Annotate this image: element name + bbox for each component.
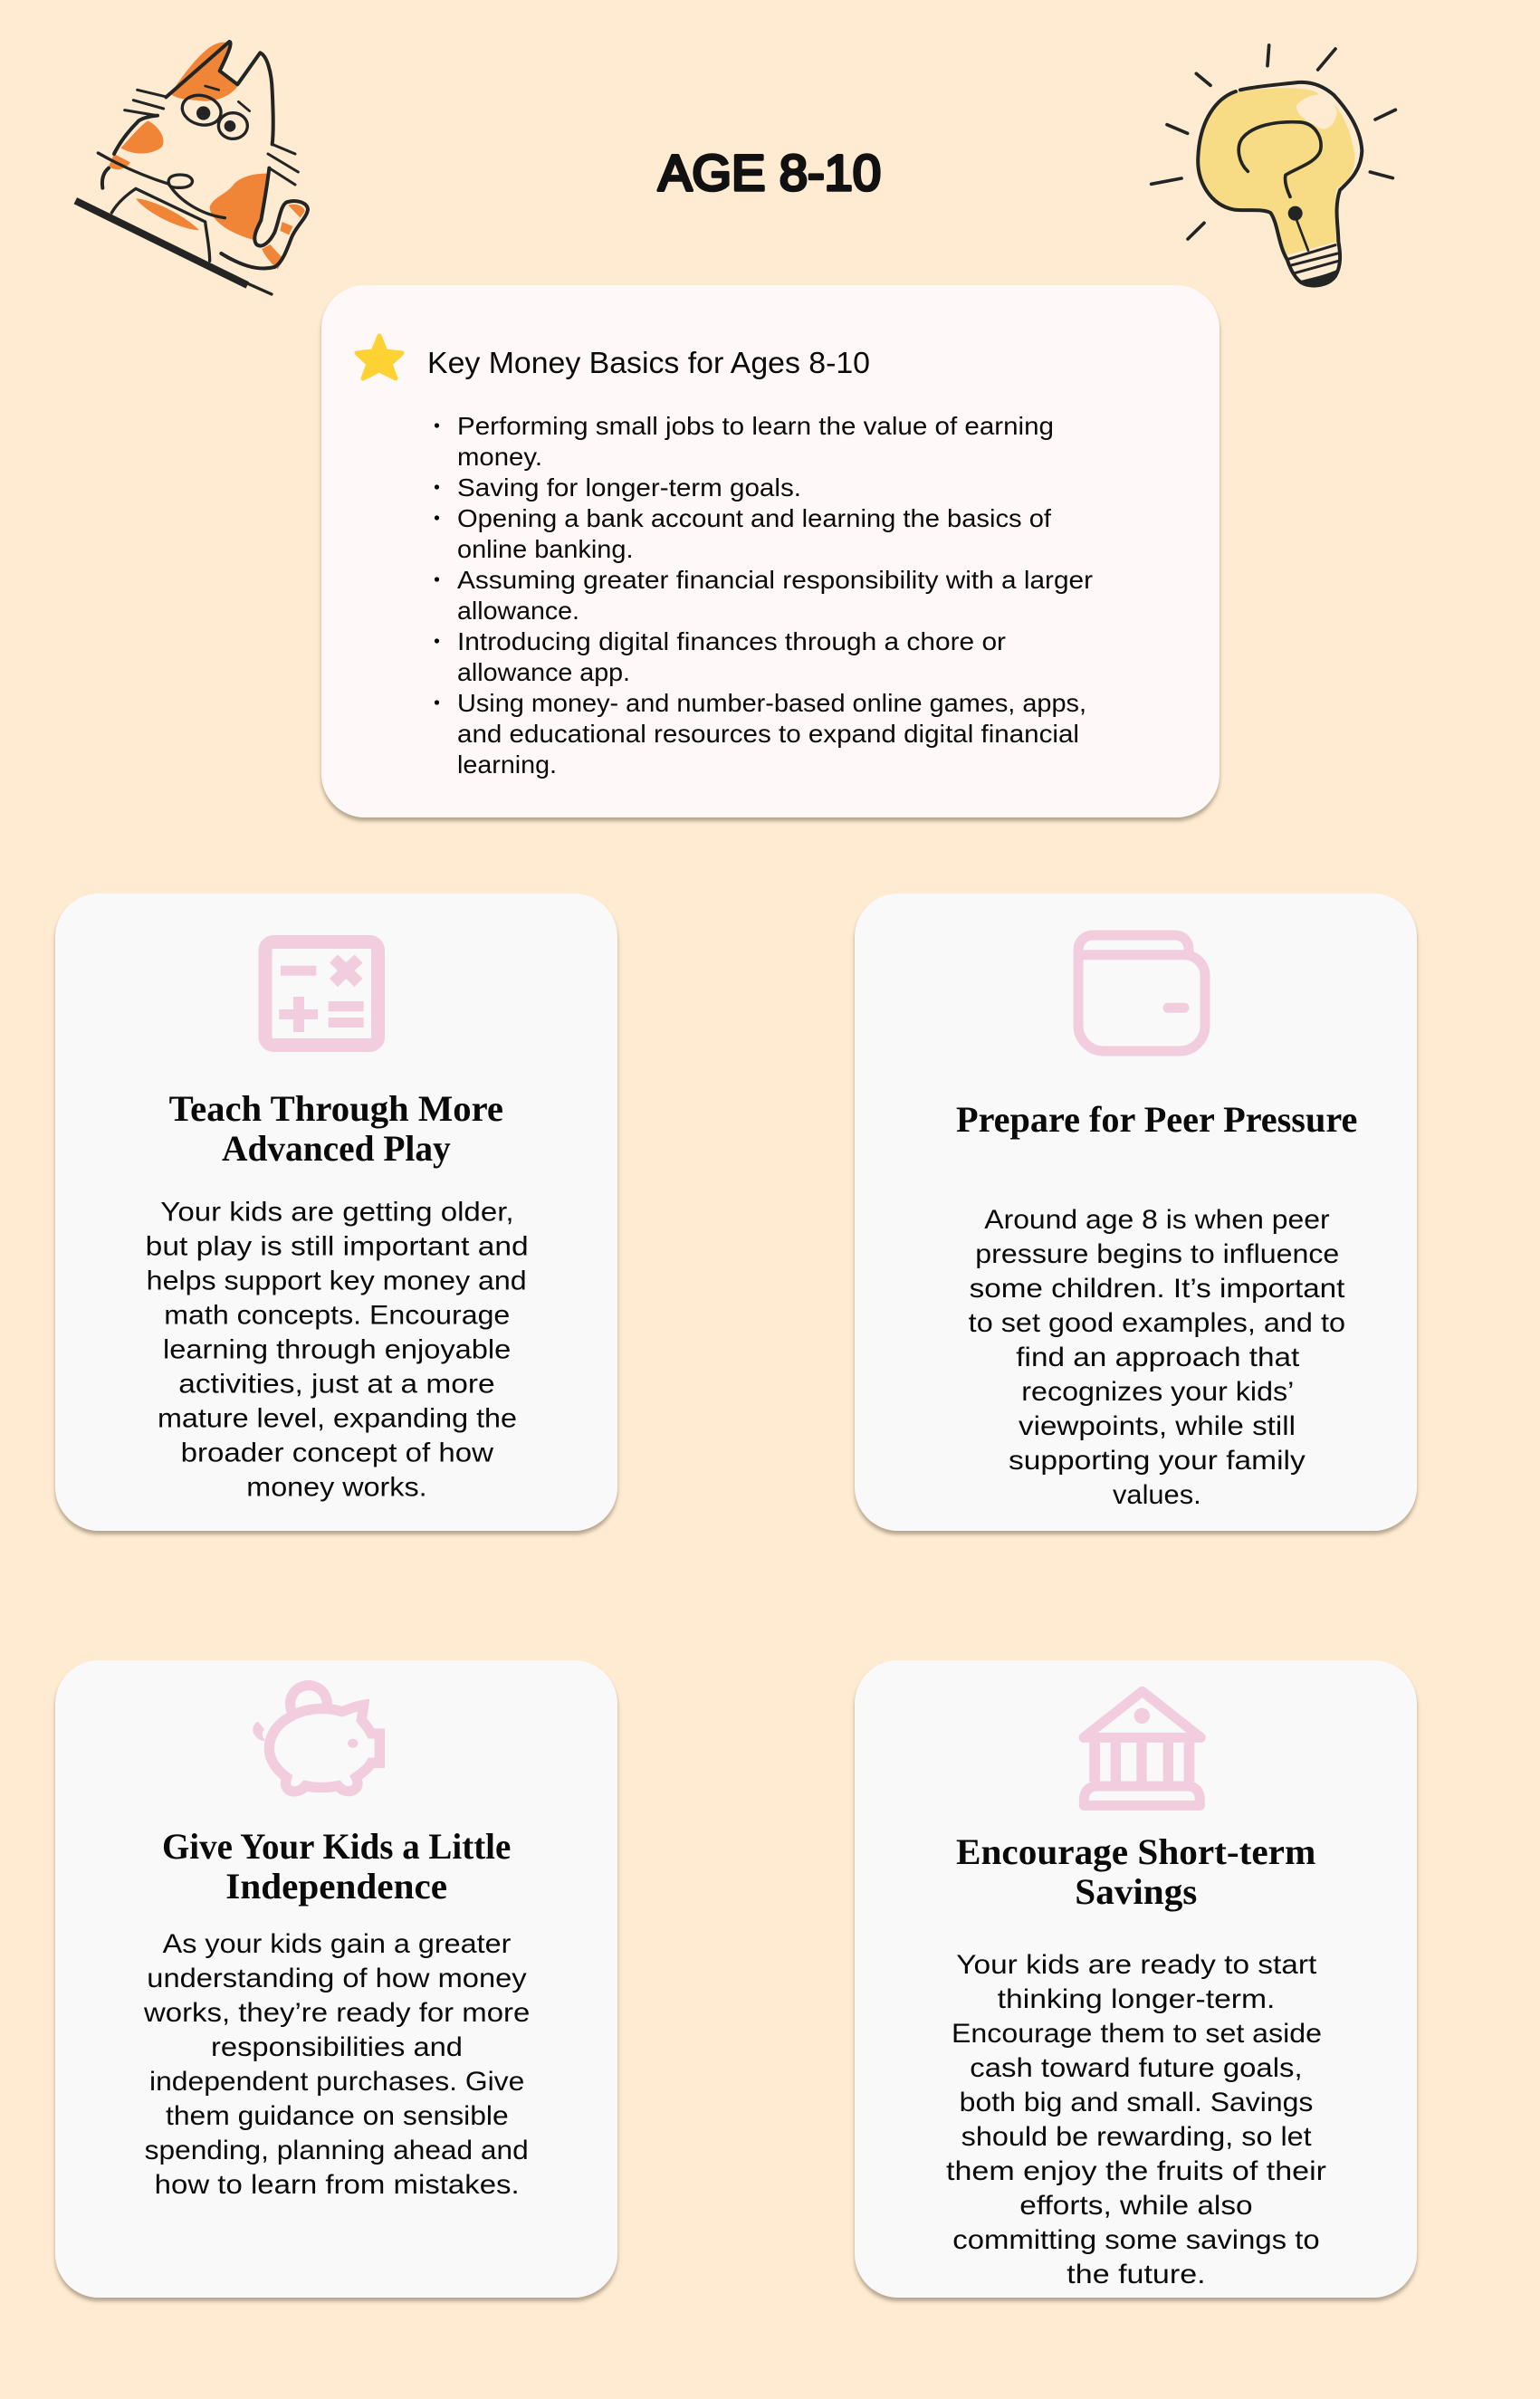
panel: independence [55, 1660, 617, 2298]
illustration: cat [75, 42, 308, 294]
card heading: Independence [225, 1866, 447, 1907]
bullet list: Introducing digital finances through a chore or [457, 627, 1006, 655]
bullet list: learning. [457, 750, 557, 779]
bullet list [435, 412, 1093, 779]
card heading [169, 1088, 503, 1169]
card body text: broader concept of how [181, 1438, 493, 1468]
card body text: mature level, expanding the [158, 1403, 517, 1434]
panel: teach through play [55, 894, 617, 1531]
card heading [956, 1831, 1315, 1912]
card heading [162, 1826, 511, 1907]
panel heading: Key Money Basics for Ages 8-10 [427, 346, 870, 379]
card body text [969, 1205, 1345, 1510]
card body text: math concepts. Encourage [164, 1300, 510, 1331]
title: AGE 8-10 [658, 144, 881, 201]
bullet list: Saving for longer-term goals. [457, 473, 801, 502]
card body text: Your kids are getting older, [160, 1197, 514, 1228]
card body text: some children. It’s important [970, 1274, 1345, 1304]
card body text: pressure begins to influence [975, 1239, 1339, 1269]
card body text: understanding of how money [147, 1964, 527, 1993]
bullet list: Performing small jobs to learn the value of earning [457, 412, 1054, 440]
card body text: responsibilities and [211, 2032, 463, 2062]
card body text: but play is still important and [146, 1231, 529, 1262]
card body text: spending, planning ahead and [145, 2136, 529, 2165]
card heading: Teach Through More [169, 1088, 503, 1129]
card body text: helps support key money and [147, 1266, 527, 1296]
card body text: Encourage them to set aside [952, 2019, 1322, 2049]
card body text: Your kids are ready to start [956, 1950, 1317, 1980]
card body text: cash toward future goals, [970, 2053, 1303, 2083]
card heading: Advanced Play [222, 1128, 451, 1169]
icon: bank building [1084, 1691, 1200, 1805]
bullet list: allowance. [457, 597, 579, 625]
card body text: them guidance on sensible [166, 2101, 509, 2131]
card heading: Encourage Short-term [956, 1831, 1315, 1872]
card body text [146, 1197, 529, 1503]
card body text: efforts, while also [1019, 2191, 1253, 2221]
icon: calculator [265, 941, 378, 1045]
card heading: Savings [1075, 1871, 1197, 1912]
card body text: the future. [1067, 2260, 1206, 2289]
card body text [143, 1929, 530, 2200]
card body text: money works. [246, 1472, 427, 1503]
card body text: Around age 8 is when peer [984, 1205, 1330, 1235]
card body text: thinking longer-term. [998, 1984, 1275, 2014]
icon: star [357, 336, 402, 378]
panel: short-term savings [855, 1660, 1417, 2298]
card body text: committing some savings to [952, 2225, 1320, 2255]
card body text: values. [1113, 1480, 1201, 1510]
bullet list: Opening a bank account and learning the basics of [457, 504, 1051, 532]
card body text: works, they’re ready for more [143, 1998, 530, 2028]
icon: wallet [1078, 935, 1205, 1051]
card body text: viewpoints, while still [1019, 1411, 1296, 1441]
card body text: them enjoy the fruits of their [946, 2156, 1326, 2186]
bullet list: allowance app. [457, 658, 630, 686]
illustration: light bulb with question mark [1152, 45, 1395, 287]
bullet list: Assuming greater financial responsibility with a larger [457, 566, 1093, 594]
icon: piggy bank [253, 1686, 379, 1792]
card body text [946, 1950, 1326, 2289]
panel: peer pressure [855, 894, 1417, 1531]
card body text: find an approach that [1016, 1343, 1300, 1372]
card heading: Give Your Kids a Little [162, 1826, 511, 1867]
bullet list: online banking. [457, 535, 634, 563]
card body text: to set good examples, and to [969, 1308, 1345, 1338]
bullet list: and educational resources to expand digital financial [457, 720, 1079, 748]
card body text: both big and small. Savings [960, 2088, 1313, 2117]
card body text: As your kids gain a greater [163, 1929, 511, 1959]
panel: key money basics [321, 285, 1220, 817]
bullet list: money. [457, 443, 542, 471]
card body text: activities, just at a more [178, 1369, 495, 1400]
card body text: learning through enjoyable [163, 1334, 511, 1365]
bullet list: Using money- and number-based online games, apps, [457, 689, 1086, 717]
card body text: supporting your family [1009, 1446, 1306, 1476]
card heading: Prepare for Peer Pressure [956, 1099, 1357, 1140]
card body text: how to learn from mistakes. [155, 2170, 520, 2200]
card body text: should be rewarding, so let [961, 2122, 1312, 2152]
card body text: recognizes your kids’ [1021, 1377, 1294, 1407]
card body text: independent purchases. Give [149, 2067, 524, 2097]
